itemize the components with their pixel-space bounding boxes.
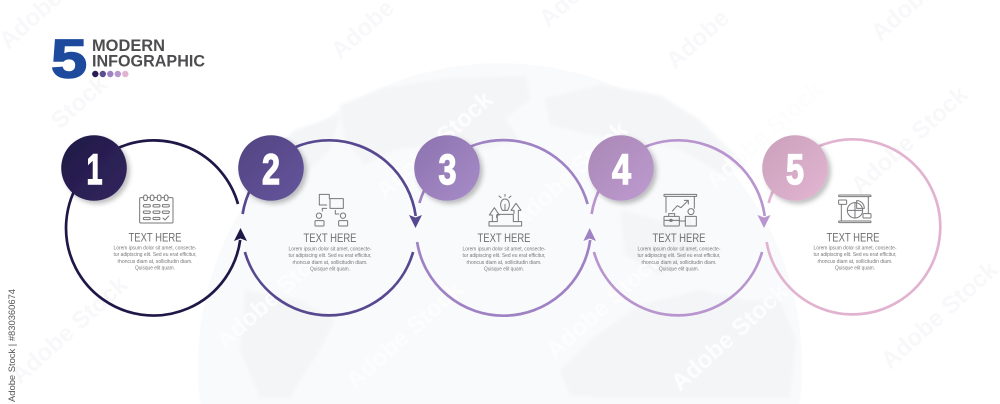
number badge xyxy=(238,135,304,201)
body text: rhoncus diam at, sollicitudin diam. xyxy=(642,260,717,266)
stock id label: Adobe Stock | #830360674 xyxy=(7,289,18,402)
heading: TEXT HERE xyxy=(304,231,356,245)
stock watermarks: Adobe Stock xyxy=(876,256,1000,374)
ring with down arrow xyxy=(592,140,770,315)
ring xyxy=(767,139,940,314)
icon: discussion xyxy=(315,194,348,226)
heading: TEXT HERE xyxy=(128,230,182,244)
stock watermarks: Stock xyxy=(46,70,113,134)
ring with down arrow xyxy=(243,140,422,315)
body text: Lorem ipsum dolor sit amet, consecte- xyxy=(462,246,546,252)
icon: podium with idea xyxy=(489,194,522,226)
stock watermarks: Adobe Stock xyxy=(341,276,469,394)
logo title: MODERN xyxy=(92,36,165,55)
body text: rhoncus diam at, sollicitudin diam. xyxy=(292,260,368,266)
body text: Quisque elit quam. xyxy=(659,266,699,272)
number badge: 5 xyxy=(786,146,804,194)
body text xyxy=(462,246,546,272)
body text: Quisque elit quam. xyxy=(310,266,350,272)
stock watermarks: Adobe Stock xyxy=(211,236,339,354)
body text: rhoncus diam at, sollicitudin diam. xyxy=(118,259,193,265)
logo dots xyxy=(92,71,128,77)
body text: Lorem ipsum dolor sit amet, consecte- xyxy=(114,246,197,252)
body text: Quisque elit quam. xyxy=(135,266,175,272)
ring with up arrow xyxy=(66,140,247,316)
heading: TEXT HERE xyxy=(478,231,530,245)
panel: step 2 xyxy=(238,135,422,315)
stock watermarks: Adobe Stock xyxy=(541,246,669,364)
number badge xyxy=(414,135,480,201)
icon: calendar xyxy=(140,195,173,223)
logo title: INFOGRAPHIC xyxy=(92,52,205,70)
body text: tur adipiscing elit. Sed eu erat efficitur, xyxy=(462,253,546,259)
body text: tur adipiscing elit. Sed eu erat efficitur, xyxy=(638,253,721,259)
icon: presentation board xyxy=(664,194,697,226)
body text: Lorem ipsum dolor sit amet, consecte- xyxy=(814,246,897,252)
stock watermarks: Adobe xyxy=(661,4,735,74)
heading: TEXT HERE xyxy=(652,231,706,245)
stock watermarks: Adobe Stock xyxy=(846,81,974,199)
body text: rhoncus diam at, sollicitudin diam. xyxy=(818,259,893,265)
logo xyxy=(51,28,205,89)
panel: step 3 xyxy=(414,135,596,316)
body text xyxy=(288,246,372,272)
number badge: 2 xyxy=(262,146,280,194)
body text xyxy=(114,246,197,272)
body text: rhoncus diam at, sollicitudin diam. xyxy=(466,260,542,266)
number badge xyxy=(762,135,828,201)
number badge: 4 xyxy=(612,146,631,194)
ring with up arrow xyxy=(417,140,596,316)
panel: step 1 xyxy=(61,135,247,316)
number badge: 3 xyxy=(438,146,456,194)
stock watermarks: Adobe Stock xyxy=(371,86,499,204)
icon: pie chart board xyxy=(839,195,871,223)
body text: tur adipiscing elit. Sed eu erat efficitur, xyxy=(288,253,372,259)
number badge xyxy=(61,135,127,201)
number badge xyxy=(588,135,654,201)
logo title xyxy=(92,36,205,70)
body text: tur adipiscing elit. Sed eu erat efficitur, xyxy=(814,252,897,258)
stock watermarks: Adobe Stock xyxy=(666,278,794,396)
logo numeral: 5 xyxy=(51,28,87,89)
body text: Quisque elit quam. xyxy=(835,266,875,272)
body text xyxy=(814,246,897,272)
body text: Lorem ipsum dolor sit amet, consecte- xyxy=(288,246,372,252)
background world map xyxy=(198,63,802,404)
number badge: 1 xyxy=(86,146,102,194)
stock watermarks: Adobe Stock xyxy=(506,116,634,234)
stock watermarks: Adobe Stock xyxy=(6,271,134,389)
body text: tur adipiscing elit. Sed eu erat efficitur, xyxy=(114,252,197,258)
body text: Quisque elit quam. xyxy=(484,266,524,272)
body text: Lorem ipsum dolor sit amet, consecte- xyxy=(638,246,721,252)
heading: TEXT HERE xyxy=(826,230,880,244)
panel: step 4 xyxy=(588,135,770,315)
panel: step 5 xyxy=(762,135,940,314)
stock watermarks: Adobe Stock xyxy=(701,76,829,194)
body text xyxy=(638,246,721,272)
